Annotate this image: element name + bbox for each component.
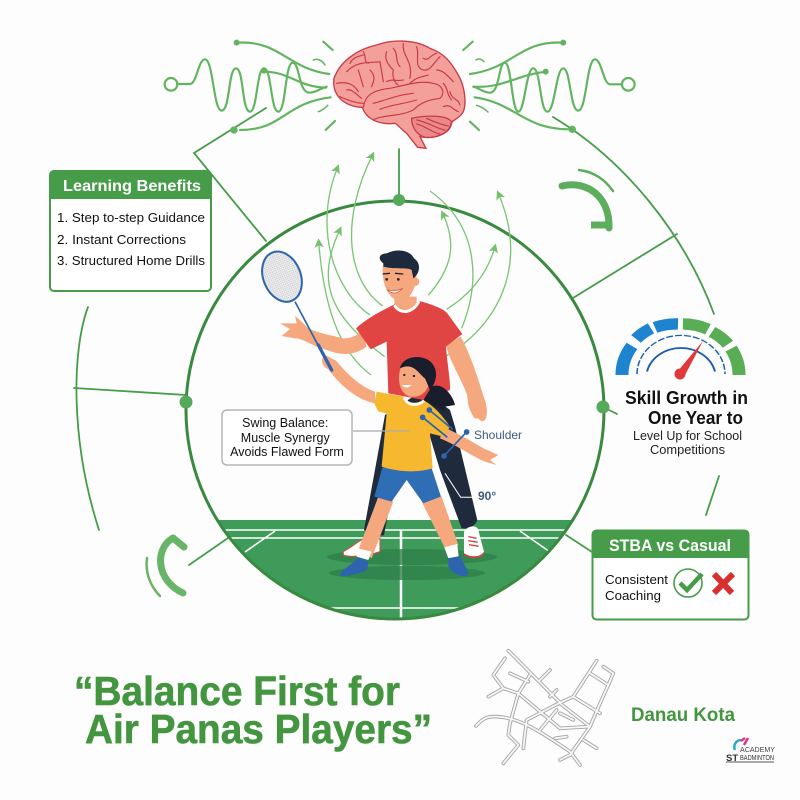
callout: swing balance: Avoids Flawed Form [230, 445, 344, 459]
callout: swing balance: Muscle Synergy [241, 431, 330, 445]
main circle [186, 201, 604, 619]
panel: learning benefits: 2. Instant Corrections [57, 232, 187, 247]
girl arms [322, 355, 375, 403]
annotation: 90 degrees: 90° [478, 489, 496, 503]
girl shoes [340, 557, 368, 576]
panel: STBA vs casual: STBA vs Casual [609, 536, 731, 555]
logo: ST [726, 753, 738, 764]
girl head [399, 364, 430, 397]
panel: learning benefits [50, 171, 211, 291]
man shoes [343, 538, 380, 556]
panel: STBA vs casual: Coaching [605, 589, 661, 603]
outer ring segments and spokes [74, 108, 719, 565]
heading: learning benefits [50, 171, 211, 199]
icon: cross [714, 574, 733, 593]
man red shirt [356, 301, 462, 400]
gauge chart [622, 324, 739, 380]
girl shorts [374, 467, 441, 503]
man right arm [280, 316, 367, 354]
man trousers [364, 390, 477, 536]
panel: learning benefits: Learning Benefits [63, 178, 201, 195]
text: skill growth [625, 388, 748, 457]
girl legs [358, 497, 393, 558]
text: skill growth: Skill Growth in [625, 388, 748, 408]
court inside main circle [219, 520, 571, 618]
energy arrows rising to brain [319, 155, 511, 375]
icon: curved arrow top right [562, 170, 613, 228]
callout: swing balance [222, 410, 409, 465]
form markers [421, 408, 469, 458]
man left arm [446, 337, 487, 421]
annotation: shoulder: Shoulder [474, 428, 522, 442]
circle node dots [180, 194, 610, 414]
needle [677, 341, 703, 377]
callout: swing balance: Swing Balance: [242, 416, 328, 430]
location label: Danau Kota [631, 705, 735, 726]
girl yellow shirt [374, 392, 450, 471]
logo: ACADEMY [740, 747, 775, 754]
wave left [165, 42, 635, 130]
panel: learning benefits: 1. Step to-step Guidance [57, 210, 205, 225]
racket [255, 246, 332, 370]
icon: check [674, 569, 702, 597]
street map [476, 651, 613, 765]
logo: BADMINTON [740, 755, 774, 762]
logo [726, 738, 775, 764]
text: skill growth: Level Up for School [633, 429, 742, 443]
title: “Balance First for [74, 668, 400, 714]
panel: STBA vs casual [592, 530, 749, 620]
text: skill growth: Competitions [650, 443, 725, 457]
man head [383, 262, 417, 302]
text: skill growth: One Year to [648, 408, 743, 428]
panel: learning benefits: 3. Structured Home Drills [57, 253, 205, 268]
girl ponytail [423, 386, 455, 412]
man neck [394, 297, 417, 310]
title [74, 668, 432, 752]
neural signals and brain [165, 40, 635, 148]
brain [334, 41, 465, 148]
icon: curved arrow bottom left [147, 538, 184, 596]
panel: STBA vs casual: Consistent [605, 573, 669, 587]
title: Air Panas Players” [85, 706, 432, 752]
man and girl illustration [255, 246, 498, 576]
